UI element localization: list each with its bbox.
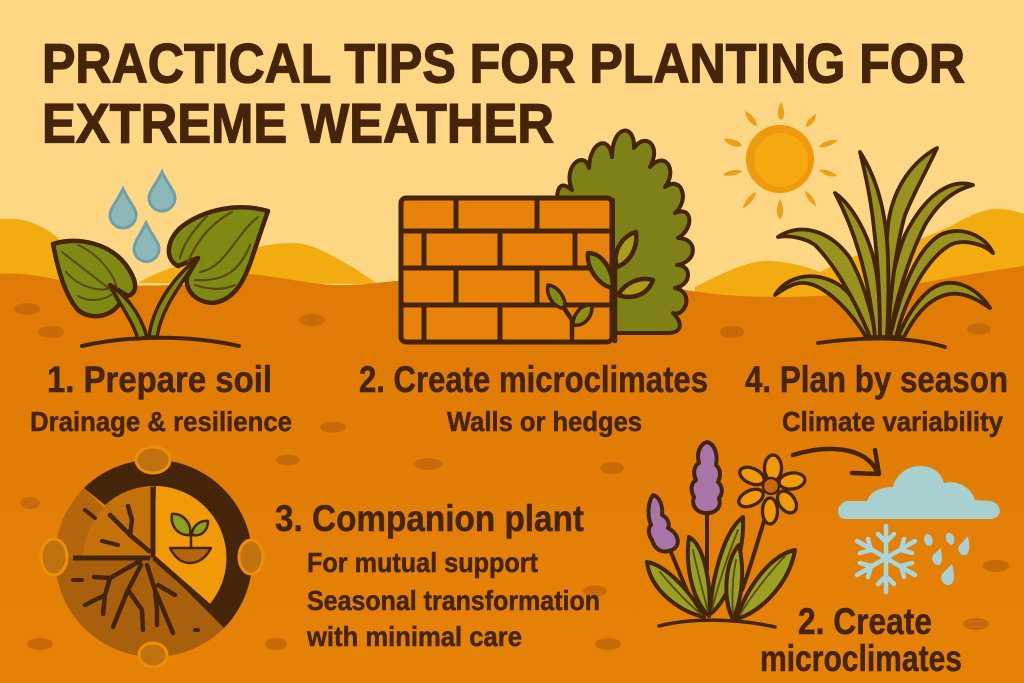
arrow to weather xyxy=(793,449,879,474)
icon: spiky grass plant xyxy=(775,148,993,347)
ground xyxy=(0,266,1024,683)
step 3 label: companion plant xyxy=(275,498,600,652)
icon: small sprigs on wall xyxy=(548,232,653,341)
step 2 repeat label: 2. Create xyxy=(798,601,932,642)
step 3 label: companion plant: For mutual support xyxy=(307,547,538,578)
step 3 label: companion plant: Seasonal transformation xyxy=(307,585,600,616)
title xyxy=(42,32,965,154)
step 3 label: companion plant: with minimal care xyxy=(306,621,522,652)
edge nodes xyxy=(41,447,263,667)
icon: sun xyxy=(723,102,838,219)
step 1 label xyxy=(30,359,292,437)
sky background xyxy=(0,0,1024,320)
icon: seedling with two leaves xyxy=(53,207,268,346)
step 1 label: Drainage & resilience xyxy=(30,406,292,437)
step 4 label: season xyxy=(745,359,1008,437)
icon: cloud xyxy=(838,466,1000,519)
step 2 repeat label xyxy=(760,601,962,679)
step 1 label: 1. Prepare soil xyxy=(47,359,272,400)
icon: lavender and flower xyxy=(647,442,806,627)
icon: water drops xyxy=(110,172,175,262)
icon: brick wall xyxy=(401,198,612,342)
icon: rain drops xyxy=(924,533,969,585)
step 2 label: microclimates: Walls or hedges xyxy=(447,406,642,437)
step 2 label: microclimates xyxy=(359,359,708,437)
dark ring sector xyxy=(84,460,252,628)
dividers and roots xyxy=(73,487,210,633)
icon: hedge xyxy=(557,131,693,333)
soil specks xyxy=(14,303,1009,650)
icon: snowflake xyxy=(857,526,915,592)
outer upper-left sector xyxy=(55,488,154,558)
step 4 label: season: Climate variability xyxy=(782,406,1003,437)
step 2 label: microclimates: 2. Create microclimates xyxy=(359,359,708,400)
sunny wedge xyxy=(154,486,226,605)
small sprout icon xyxy=(170,514,211,563)
leaves xyxy=(647,517,795,619)
icon: soil cross-section circle xyxy=(41,447,263,667)
orange flower xyxy=(736,455,806,524)
background hills xyxy=(0,209,1024,300)
inner upper-left sector xyxy=(83,487,154,558)
title: EXTREME WEATHER xyxy=(42,92,554,154)
lavender spikes xyxy=(692,442,722,513)
step 3 label: companion plant: 3. Companion plant xyxy=(275,498,584,539)
outer lower sector xyxy=(55,558,224,657)
step 2 repeat label: microclimates xyxy=(760,638,962,679)
